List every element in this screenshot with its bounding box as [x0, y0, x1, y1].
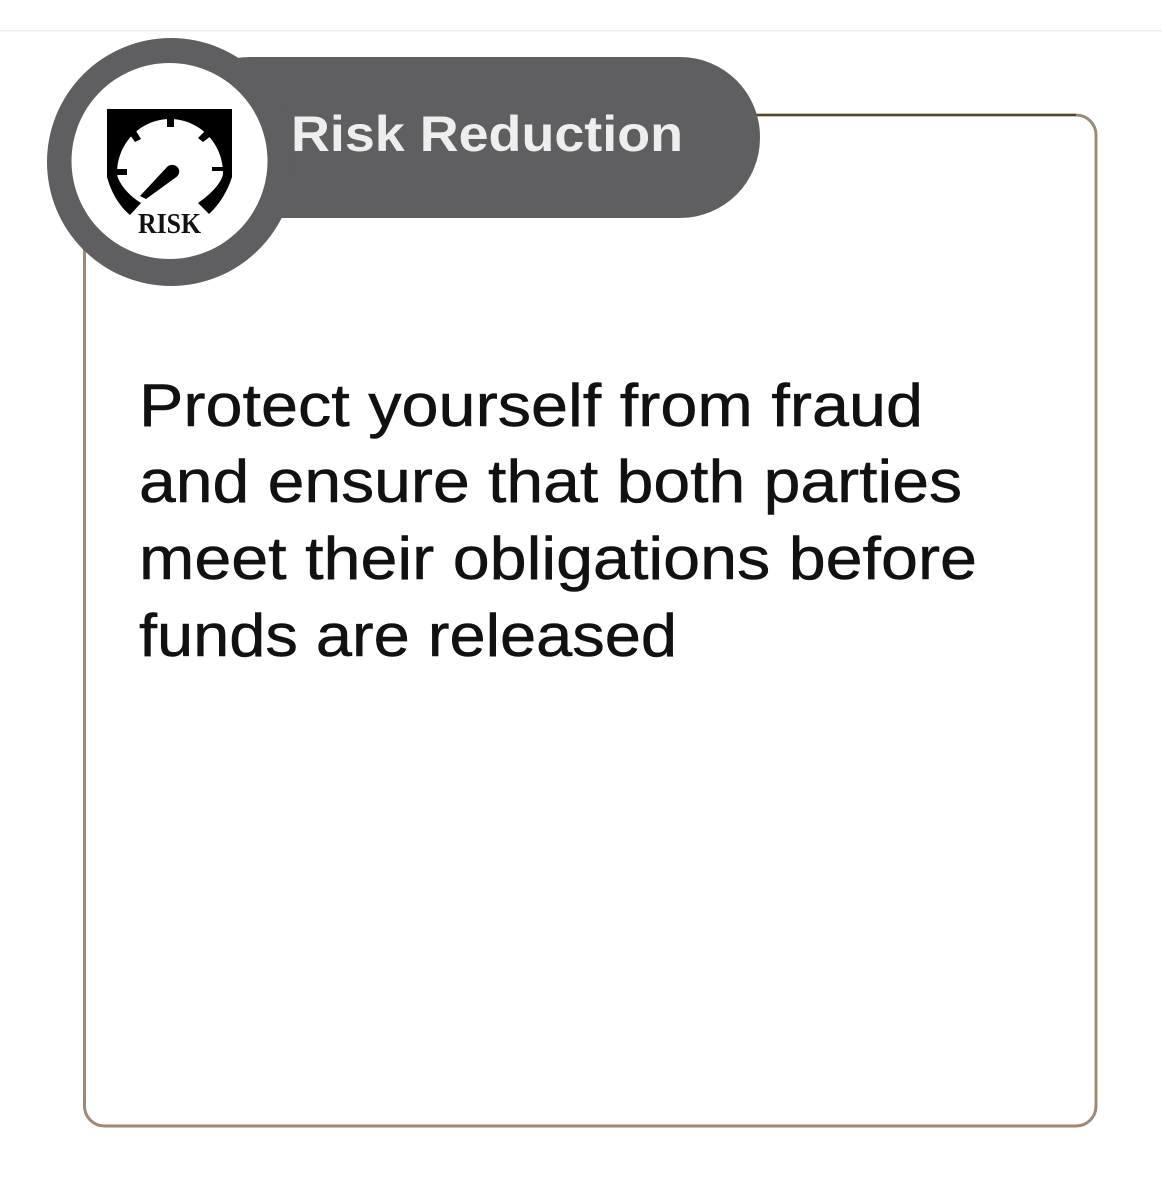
header: risk reduction badge — [47, 38, 760, 286]
body text: funds are released — [139, 602, 677, 669]
body text: and ensure that both parties — [139, 448, 962, 515]
header pill — [170, 57, 760, 218]
panel: card outline — [84, 115, 1096, 1126]
icon background — [72, 63, 268, 259]
body text — [139, 372, 977, 669]
body text: Protect yourself from fraud — [139, 372, 923, 439]
body text: meet their obligations before — [139, 525, 977, 592]
heading: Risk Reduction — [291, 106, 683, 162]
icon ring — [47, 38, 295, 286]
icon label: RISK — [138, 209, 201, 240]
icon: risk gauge shield — [107, 109, 232, 240]
